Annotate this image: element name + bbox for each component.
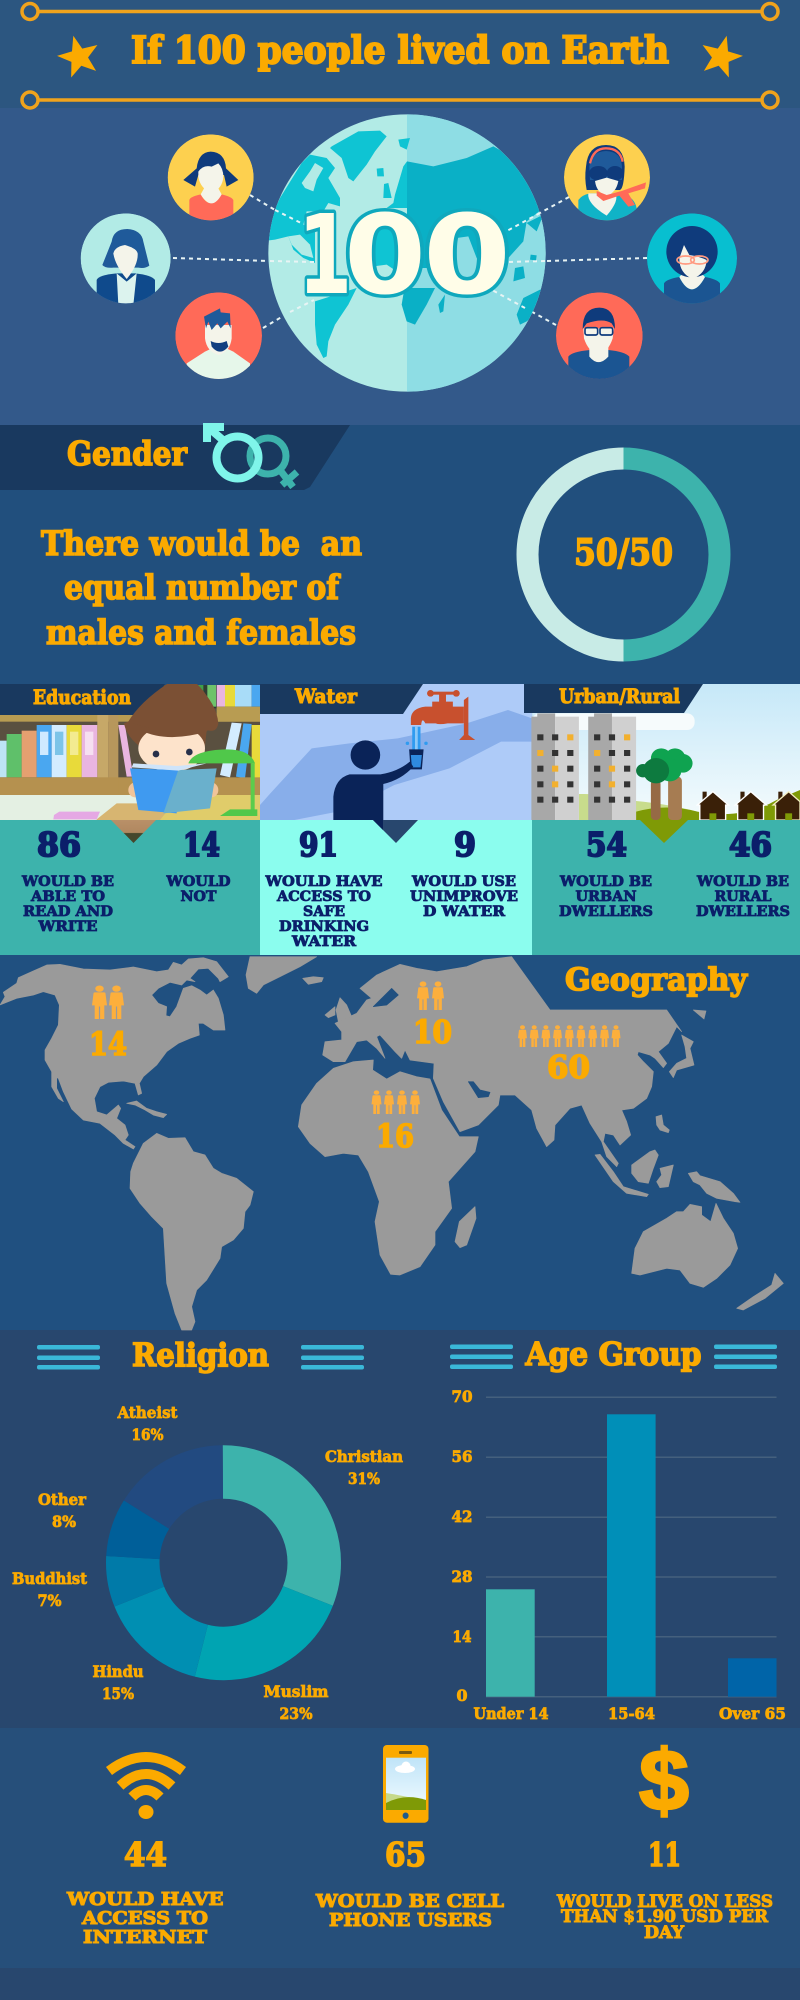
stat: europe: 10: [413, 1013, 452, 1051]
big number: [298, 191, 511, 319]
text block: WOULD HAVE: [66, 1889, 224, 1910]
stat: 86: [21, 825, 114, 935]
text block: THAN $1.90 USD PER: [561, 1907, 769, 1927]
connectors outside the globe: [173, 195, 647, 328]
avatar: business woman: [81, 213, 171, 305]
avatars left column: [81, 134, 262, 382]
big number: 0: [423, 191, 511, 319]
heading: Geography: [565, 962, 748, 998]
donut labels: Buddhist: [12, 1569, 88, 1588]
bar chart: 14: [452, 1627, 472, 1646]
stat: asia: 60: [547, 1048, 590, 1086]
donut labels: 16%: [132, 1425, 164, 1444]
stat: 91: 91: [299, 825, 338, 864]
text block: equal number of: [64, 568, 341, 608]
icon: wifi: [109, 1757, 183, 1819]
big number: 1: [298, 191, 352, 319]
donut labels: Muslim: [264, 1682, 329, 1701]
text block: [66, 1889, 224, 1948]
stat: 54: URBAN: [576, 889, 636, 905]
text block: INTERNET: [83, 1927, 208, 1948]
panel: age group: [450, 1335, 786, 1723]
avatar: bearded man: [175, 292, 262, 382]
text block: males and females: [46, 613, 356, 653]
text block: ACCESS TO: [81, 1908, 208, 1929]
stat: 9: UNIMPROVE: [410, 889, 518, 905]
stat: 46: WOULD BE: [696, 874, 789, 890]
donut chart: [528, 458, 720, 650]
big number: 0: [344, 191, 426, 319]
stat: 86: WOULD BE: [21, 874, 114, 890]
text block: WOULD LIVE ON LESS: [556, 1892, 773, 1912]
icon: left star: [53, 30, 104, 80]
illustration: city and village: [531, 684, 800, 820]
stat: 9: 9: [454, 825, 476, 864]
title: If 100 people lived on Earth: [131, 28, 669, 72]
text block: [556, 1892, 773, 1943]
heading: Education: [33, 685, 131, 709]
header: [22, 4, 778, 108]
panel: geography: [0, 957, 783, 1330]
bar chart: 42: [452, 1507, 472, 1526]
bar chart: [452, 1387, 786, 1723]
stats background: [0, 820, 260, 955]
bar chart: 56: [452, 1447, 472, 1466]
donut labels: 8%: [52, 1512, 76, 1531]
bar chart: 0: [456, 1686, 468, 1705]
panel: income: [556, 1733, 773, 1943]
stat: 54: [559, 825, 653, 920]
text block: There would be an: [41, 524, 362, 564]
panel: urban rural: [524, 684, 800, 955]
donut labels: 23%: [280, 1704, 312, 1723]
bar chart: 70: [452, 1387, 472, 1406]
illustration: boy reading: [0, 685, 260, 820]
bar chart: 28: [452, 1567, 472, 1586]
avatar: man with glasses: [556, 292, 643, 385]
stat: 91: ACCESS TO: [276, 889, 371, 905]
stat: 91: SAFE: [303, 904, 345, 920]
banner: [0, 684, 165, 715]
stat: 54: DWELLERS: [559, 904, 653, 920]
panel: internet: [66, 1757, 224, 1948]
stat: 9: [410, 825, 518, 920]
heading: Gender: [67, 434, 188, 473]
icon: dollar: $: [639, 1733, 689, 1829]
heading: Water: [294, 684, 357, 708]
text block: [315, 1891, 504, 1931]
stat: 14: NOT: [180, 889, 216, 905]
stat: 86: ABLE TO: [30, 889, 105, 905]
stat: 91: WOULD HAVE: [264, 874, 382, 890]
heading bars: [37, 1345, 364, 1370]
globe: [260, 114, 546, 392]
donut labels: Christian: [325, 1447, 403, 1466]
stat: africa: [372, 1090, 420, 1155]
stat: 86: 86: [37, 825, 81, 864]
stat: asia: [518, 1025, 620, 1086]
number: 11: [648, 1835, 681, 1874]
stat: 14: [165, 825, 231, 905]
heading: Religion: [132, 1336, 269, 1374]
stat: 9: D WATER: [423, 904, 506, 920]
stat: 91: WATER: [291, 934, 357, 950]
stat: 46: 46: [729, 825, 772, 864]
panel: education: [0, 684, 260, 955]
text block: PHONE USERS: [329, 1910, 492, 1931]
donut labels: Atheist: [117, 1403, 178, 1422]
donut labels: 7%: [38, 1591, 62, 1610]
stat: 86: WRITE: [37, 919, 98, 935]
person notch: [373, 820, 383, 830]
big number: 0: [423, 191, 511, 319]
banner: [524, 684, 703, 713]
bar chart: 15-64: [608, 1704, 655, 1723]
stat: 46: [696, 825, 790, 920]
text block: WOULD BE CELL: [315, 1891, 504, 1912]
stat: 46: DWELLERS: [696, 904, 790, 920]
avatar: woman with red glasses: [647, 213, 737, 305]
icon: gender symbols: [207, 427, 297, 487]
boy hair over banner: [128, 684, 216, 728]
avatar: woman with sunglasses: [564, 134, 650, 222]
world map: [0, 957, 783, 1330]
avatars right column: [556, 134, 737, 385]
stat: 46: RURAL: [714, 889, 772, 905]
banner: [260, 684, 423, 714]
stat: 86: READ AND: [23, 904, 113, 920]
stat: 91: [264, 825, 382, 950]
stat: north america: 14: [89, 1025, 127, 1063]
number: 44: [124, 1835, 167, 1874]
stat: 9: WOULD USE: [411, 874, 516, 890]
stat: 91: DRINKING: [279, 919, 369, 935]
pointer: [640, 820, 688, 843]
stat: europe: [413, 981, 452, 1051]
donut labels: Other: [38, 1490, 87, 1509]
donut labels: 15%: [102, 1684, 134, 1703]
heading bars: [450, 1344, 777, 1369]
stats background: [260, 820, 532, 955]
panel: water: [260, 684, 532, 955]
icon: phone: [383, 1745, 428, 1823]
stats background: [532, 820, 800, 955]
stat: 54: WOULD BE: [559, 874, 652, 890]
top rail: [22, 4, 778, 20]
big number: 1: [298, 191, 352, 319]
text block: DAY: [644, 1923, 685, 1943]
donut chart: 50/50: [574, 532, 673, 574]
avatar: yellow woman: [168, 134, 254, 222]
bar chart: Over 65: [719, 1704, 786, 1723]
donut chart: [133, 1472, 314, 1653]
donut labels: 31%: [348, 1469, 380, 1488]
panel: religion: [12, 1336, 403, 1723]
bar chart: Under 14: [474, 1704, 548, 1723]
stat: north america: [89, 985, 127, 1063]
hero: globe and people: [81, 114, 737, 392]
stat: 14: WOULD: [165, 874, 231, 890]
panel: gender: [0, 425, 720, 653]
panel: cell phone: [315, 1745, 504, 1931]
stat: 14: 14: [183, 825, 220, 864]
stat: 54: 54: [586, 825, 627, 864]
donut labels: [12, 1403, 403, 1723]
stat: africa: 16: [376, 1117, 414, 1155]
illustration: person at tap: [260, 684, 532, 820]
banner: [0, 425, 350, 490]
text block: [41, 524, 362, 653]
icon: right star: [696, 30, 747, 80]
big number: 0: [344, 191, 426, 319]
bottom rail: [22, 92, 778, 108]
heading: Age Group: [525, 1335, 702, 1373]
number: 65: [385, 1835, 426, 1874]
donut labels: Hindu: [92, 1662, 144, 1681]
pointer: [111, 820, 156, 843]
heading: Urban/Rural: [559, 684, 680, 708]
connectors over the globe: [270, 210, 545, 312]
